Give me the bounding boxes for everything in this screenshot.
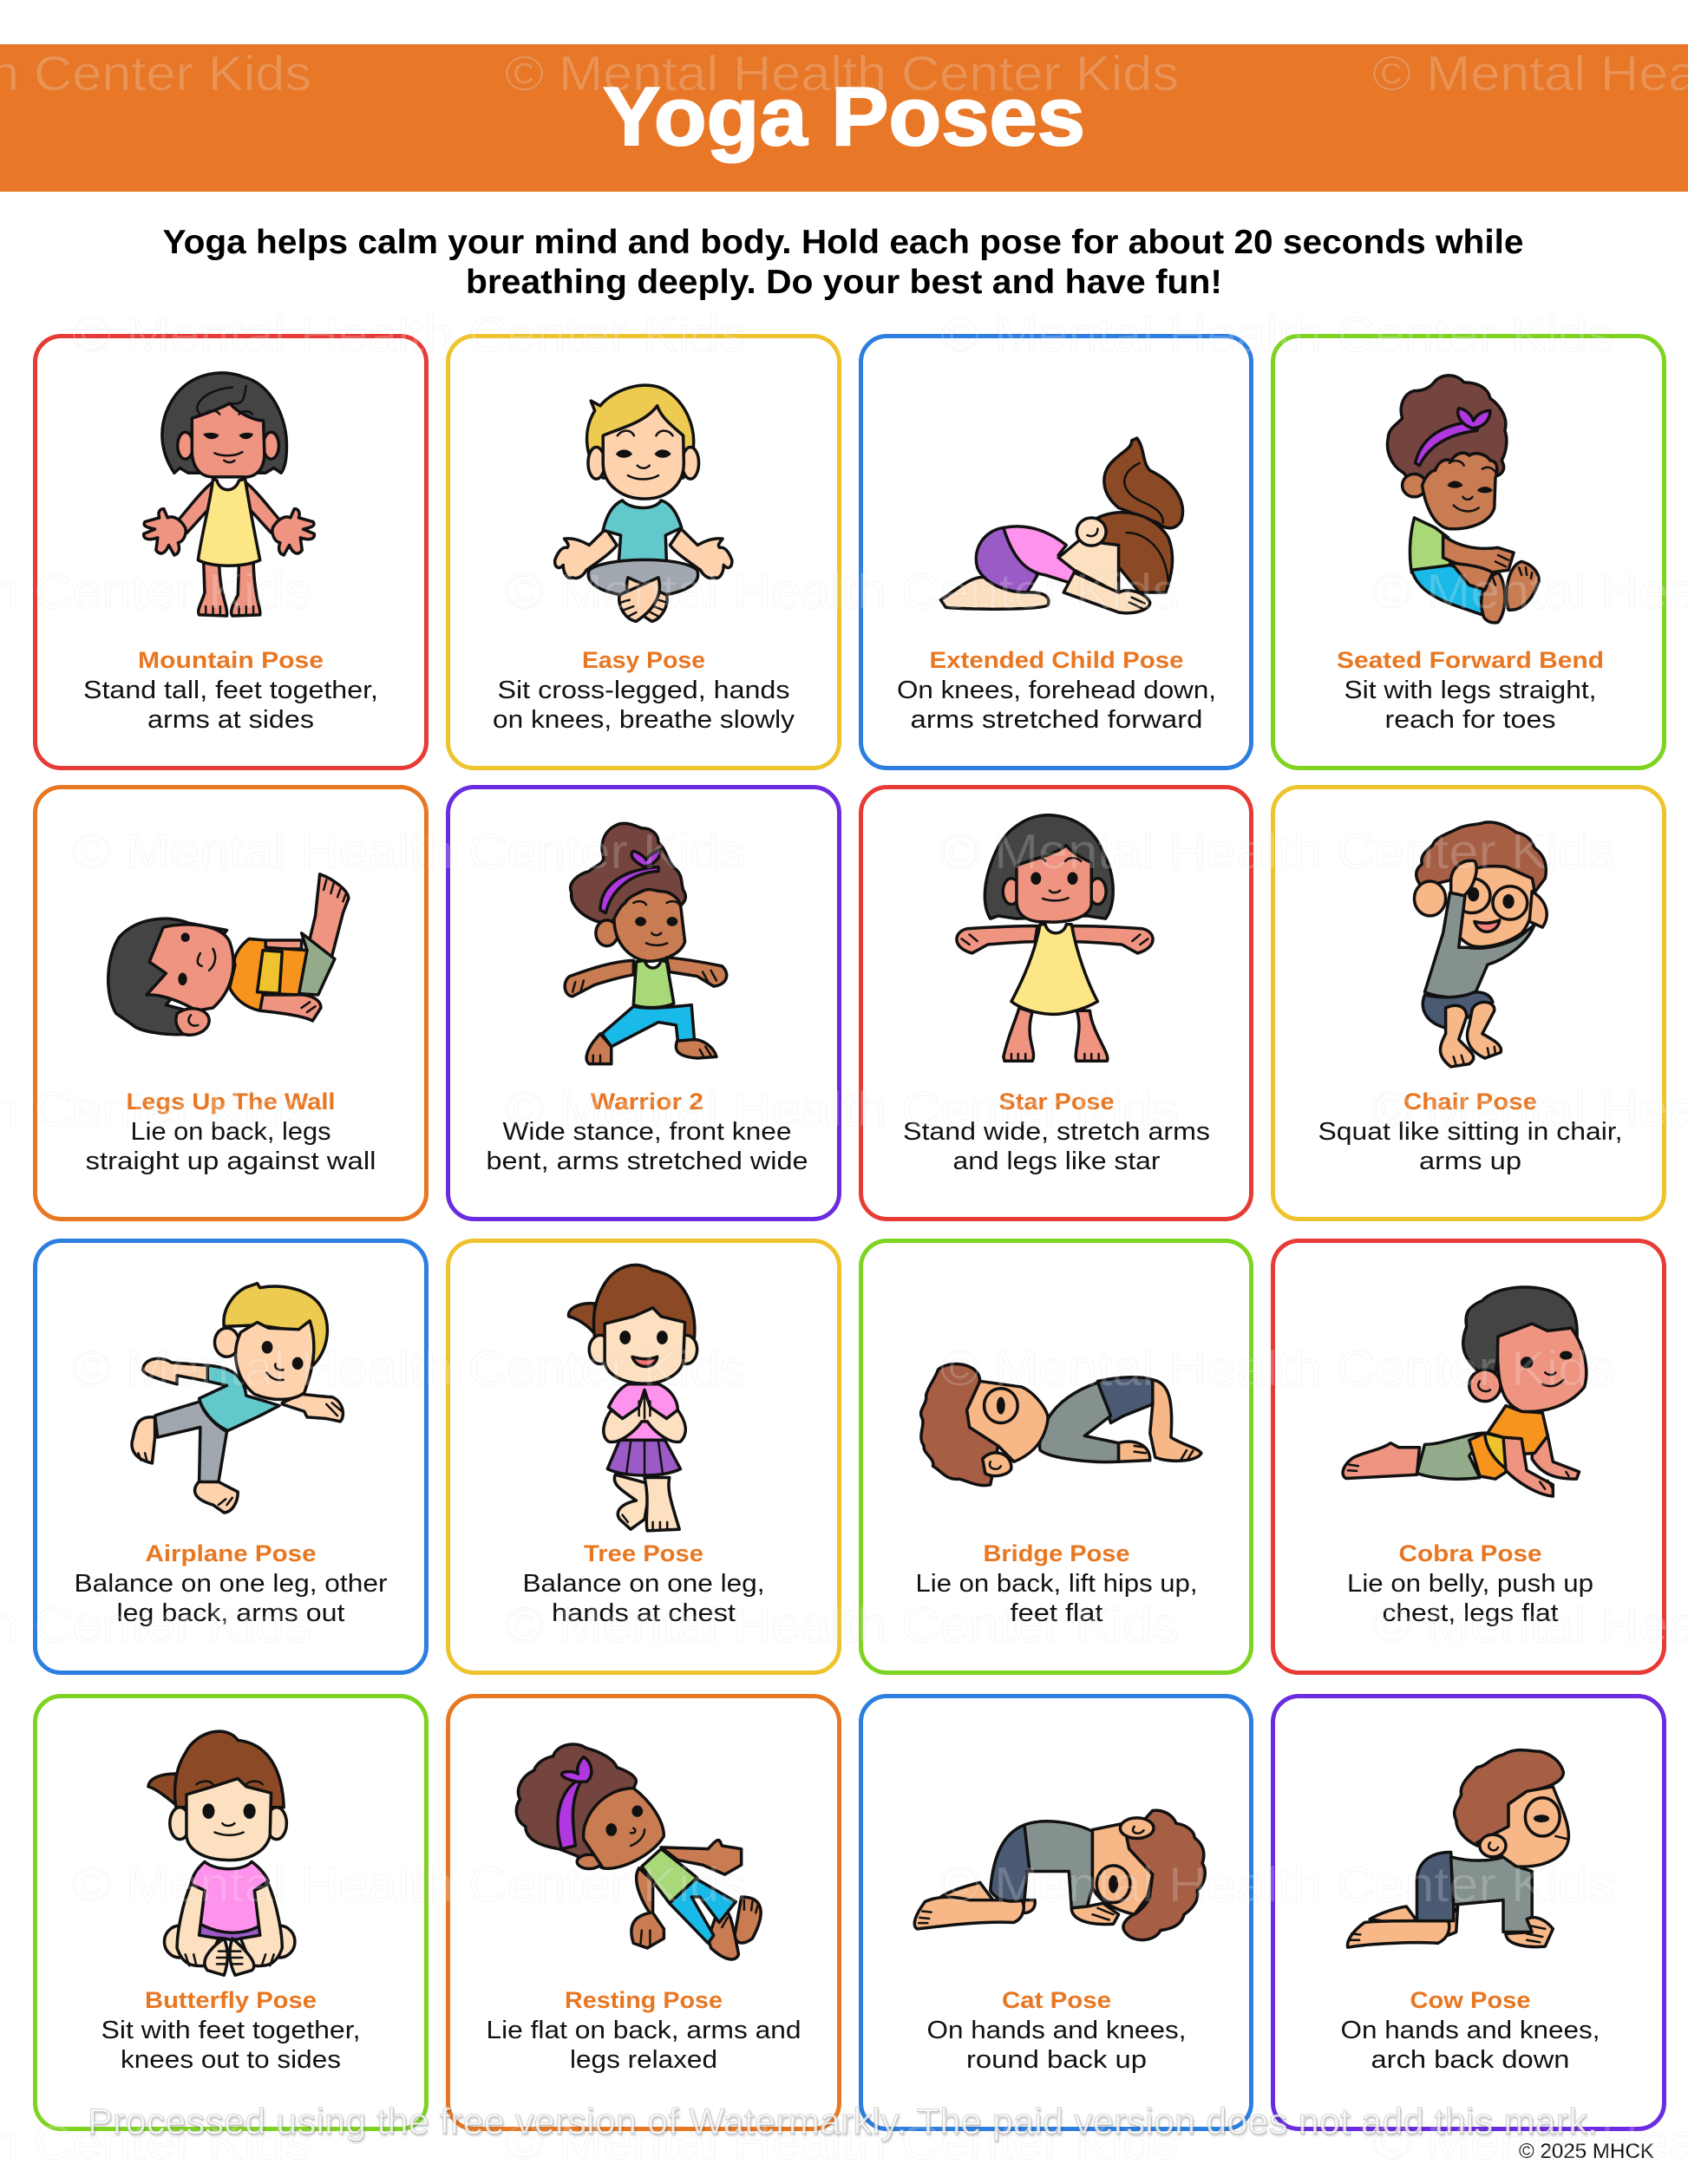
pose description: and legs like star (952, 1148, 1161, 1175)
pose description: Sit with feet together, (101, 2017, 361, 2044)
pose description: Balance on one leg, (522, 1570, 765, 1598)
pose description: leg back, arms out (116, 1599, 345, 1627)
watermark tiles: © Mental Health Center Kids (505, 564, 1179, 619)
pose description: Balance on one leg, other (75, 1570, 388, 1598)
pose description (897, 677, 1216, 734)
pose description: Lie on back, lift hips up, (916, 1570, 1197, 1598)
processed-by watermark line: Processed using the free version of Watermarkly. The paid version does not add this mark. (88, 2101, 1598, 2141)
icon: easy pose child (555, 385, 732, 621)
watermark tiles: © Mental Health Center Kids (72, 307, 746, 363)
icon: cat pose child (914, 1810, 1205, 1940)
pose description: legs relaxed (570, 2046, 717, 2074)
pose description (101, 2017, 361, 2074)
watermark tiles: © Mental Health Center Kids (505, 1598, 1179, 1653)
panel: Tree Pose (448, 1240, 840, 1672)
pose description (916, 1570, 1197, 1627)
pose description: arms at sides (147, 706, 314, 734)
intro text (163, 224, 1523, 301)
pose description (522, 1570, 765, 1627)
pose description: Lie flat on back, arms and (486, 2017, 801, 2044)
panel: Resting Pose (448, 1697, 840, 2128)
pose name: Extended Child Pose (930, 647, 1183, 673)
panel: Airplane Pose (35, 1240, 427, 1672)
watermark tiles: © Mental Health Center Kids (940, 824, 1614, 879)
icon: resting pose child (516, 1744, 761, 1959)
pose description (85, 1118, 376, 1175)
icon: warrior two child (565, 823, 727, 1064)
pose name: Warrior 2 (591, 1089, 703, 1115)
pose name: Butterfly Pose (145, 1987, 317, 2013)
panel: Seated Forward Bend (1273, 337, 1664, 768)
pose description: chest, legs flat (1383, 1599, 1558, 1627)
pose description: arch back down (1371, 2046, 1570, 2074)
icon: mountain pose child (144, 373, 314, 616)
panel: Warrior 2 (448, 788, 840, 1220)
panel: Cobra Pose (1273, 1240, 1664, 1672)
pose description: Wide stance, front knee (503, 1118, 791, 1146)
pose name: Cow Pose (1410, 1987, 1530, 2013)
panel: Bridge Pose (860, 1240, 1251, 1672)
watermark tiles: © Mental Health Center Kids (72, 1341, 746, 1396)
pose description: on knees, breathe slowly (493, 706, 795, 734)
pose name: Mountain Pose (138, 647, 324, 673)
panel: Butterfly Pose (35, 1697, 427, 2128)
pose description: On hands and knees, (1341, 2017, 1600, 2044)
pose description: Lie on belly, push up (1347, 1570, 1593, 1598)
pose name: Cobra Pose (1398, 1540, 1542, 1566)
panel: Mountain Pose (35, 337, 427, 768)
icon: seated forward bend child (1388, 376, 1539, 623)
icon: extended child pose (940, 438, 1182, 613)
pose description (1318, 1118, 1622, 1175)
pose description (486, 2017, 801, 2074)
pose description: Squat like sitting in chair, (1318, 1118, 1622, 1146)
pose description: Sit with legs straight, (1345, 677, 1596, 704)
icon: chair pose child (1414, 822, 1547, 1067)
pose description: Lie on back, legs (130, 1118, 331, 1146)
watermark tiles: © Mental Health Center Kids (72, 1857, 746, 1913)
panel: Easy Pose (448, 337, 840, 768)
pose description: arms up (1419, 1148, 1521, 1175)
copyright: © 2025 MHCK (1519, 2140, 1654, 2163)
pose description: reach for toes (1384, 706, 1556, 734)
pose description: Stand tall, feet together, (83, 677, 378, 704)
pose name: Easy Pose (582, 647, 705, 673)
panel: Star Pose (860, 788, 1251, 1220)
icon: legs up the wall child (108, 874, 349, 1035)
pose description (926, 2017, 1187, 2074)
pose description (1345, 677, 1596, 734)
pose description (1341, 2017, 1600, 2074)
pose name: Resting Pose (565, 1987, 723, 2013)
intro text: Yoga helps calm your mind and body. Hold each pose for about 20 seconds while (163, 224, 1523, 261)
pose description: On knees, forehead down, (897, 677, 1216, 704)
pose description (75, 1570, 388, 1627)
watermark tiles: © Mental Health Center Kids (940, 1857, 1614, 1913)
pose name: Seated Forward Bend (1337, 647, 1604, 673)
pose description (486, 1118, 808, 1175)
intro text: breathing deeply. Do your best and have fun! (466, 264, 1222, 301)
pose name: Tree Pose (584, 1540, 703, 1566)
panel: Chair Pose (1273, 788, 1664, 1220)
watermark tiles: © Mental Health Center Kids (505, 46, 1179, 101)
pose name: Airplane Pose (146, 1540, 316, 1566)
watermark tiles: © Mental Health Center Kids (505, 1082, 1179, 1137)
icon: tree pose child (569, 1265, 697, 1531)
icon: cow pose child (1348, 1750, 1568, 1947)
watermark tiles: © Mental Health Center Kids (940, 307, 1614, 363)
title: Yoga Poses (603, 70, 1085, 163)
pose description: On hands and knees, (926, 2017, 1187, 2044)
watermark tiles: © Mental Health Center Kids (72, 824, 746, 879)
pose description (903, 1118, 1210, 1175)
icon: bridge pose child (921, 1364, 1201, 1486)
icon: airplane pose child (132, 1284, 343, 1513)
watermark tiles: © Mental Health Center Kids (940, 1341, 1614, 1396)
pose name: Bridge Pose (984, 1540, 1129, 1566)
pose name: Star Pose (999, 1089, 1114, 1115)
pose description: feet flat (1010, 1599, 1103, 1627)
pose description: Stand wide, stretch arms (903, 1118, 1210, 1146)
pose name: Legs Up The Wall (127, 1089, 335, 1115)
icon: cobra pose child (1343, 1287, 1587, 1496)
pose description: bent, arms stretched wide (486, 1148, 808, 1175)
pose description (83, 677, 378, 734)
pose name: Cat Pose (1002, 1987, 1111, 2013)
pose description: knees out to sides (121, 2046, 341, 2074)
pose description: hands at chest (552, 1599, 736, 1627)
pose description (1347, 1570, 1593, 1627)
pose name: Chair Pose (1403, 1089, 1537, 1115)
icon: butterfly pose child (148, 1731, 295, 1975)
icon: star pose child (957, 815, 1153, 1061)
pose description (493, 677, 795, 734)
watermark tiles: © Mental Health Center Kids (505, 2115, 1179, 2170)
pose description: Sit cross-legged, hands (498, 677, 789, 704)
pose description: straight up against wall (85, 1148, 376, 1175)
panel: Cat Pose (860, 1697, 1251, 2128)
panel: Extended Child Pose (860, 337, 1251, 768)
panel: Cow Pose (1273, 1697, 1664, 2128)
pose description: round back up (966, 2046, 1147, 2074)
header band (0, 44, 1688, 192)
pose description: arms stretched forward (911, 706, 1202, 734)
panel: Legs Up The Wall (35, 788, 427, 1220)
